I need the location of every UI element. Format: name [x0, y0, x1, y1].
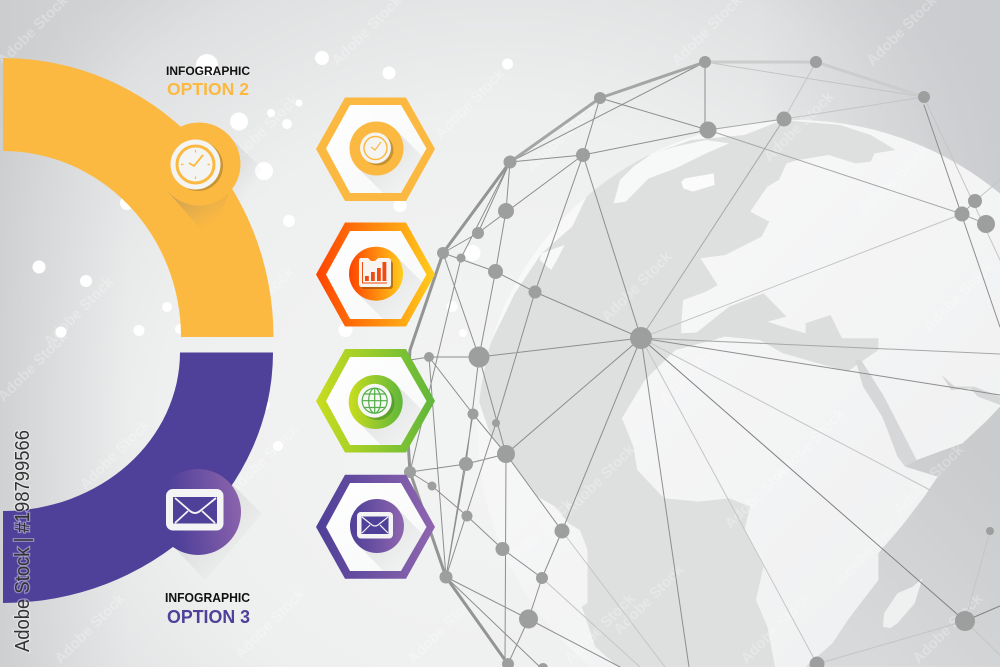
watermark: Adobe Stock [855, 141, 933, 218]
long shadow: yellow circle [205, 135, 262, 205]
watermark: Adobe Stock [832, 511, 910, 588]
hexagon badge: clock [316, 98, 435, 201]
Indian ocean [806, 407, 1000, 667]
watermark: Adobe Stock [220, 263, 298, 340]
heading: option 3: OPTION 3 [167, 607, 250, 627]
watermark: Adobe Stock [737, 590, 815, 667]
network nodes [404, 56, 995, 667]
network wireframe [406, 62, 1000, 667]
icon: clock small [360, 132, 394, 166]
heading: option 2 [166, 64, 250, 99]
heading: option 2: OPTION 2 [167, 79, 249, 99]
watermark: Adobe Stock [656, 331, 734, 408]
hexagon badge: globe [316, 349, 435, 452]
heading: option 3: INFOGRAPHIC [165, 591, 250, 605]
icon: bar chart [359, 258, 393, 289]
watermark: Adobe Stock [523, 98, 601, 175]
watermark: Adobe Stock [61, 83, 139, 160]
stock id vertical text: Adobe Stock | #198799566 [12, 430, 34, 652]
icon: globe [358, 384, 394, 420]
watermark: Adobe Stock [760, 88, 838, 165]
Mediterranean sea [676, 293, 878, 372]
Iceland [681, 173, 715, 192]
watermark: Adobe Stock [225, 91, 303, 168]
Madagascar [883, 578, 922, 628]
Greenland [614, 140, 729, 203]
Persian Gulf [942, 375, 1000, 405]
watermark: Adobe Stock [610, 561, 688, 638]
Red Sea [857, 362, 916, 466]
watermark: Adobe Stock [404, 590, 482, 667]
watermark: Adobe Stock [561, 590, 639, 667]
watermark: Adobe Stock [51, 590, 129, 667]
watermark: Adobe Stock [920, 258, 998, 335]
hexagon badge: bar chart [316, 222, 435, 326]
watermark: Adobe Stock [76, 416, 154, 493]
purple arc segment: option 3 [3, 352, 273, 603]
heading: option 2: INFOGRAPHIC [166, 64, 250, 78]
scattered white dots [32, 51, 513, 451]
watermark: Adobe Stock [231, 585, 309, 662]
hexagon badge: envelope [316, 474, 435, 579]
watermark: Adobe Stock [225, 421, 303, 498]
watermark: Adobe Stock [890, 441, 968, 518]
heading: option 3 [165, 591, 250, 627]
watermark: Adobe Stock [431, 65, 509, 142]
watermark: Adobe Stock [499, 495, 577, 572]
yellow arc segment: option 2 [3, 58, 274, 337]
watermark: Adobe Stock [561, 441, 639, 518]
icon: envelope [166, 489, 224, 530]
watermark: Adobe Stock [909, 590, 987, 667]
world map globe [470, 110, 1000, 667]
watermark: Adobe Stock [771, 405, 849, 482]
watermark: Adobe Stock [721, 455, 799, 532]
watermark: Adobe Stock [40, 273, 118, 350]
long shadow: purple circle [172, 481, 262, 580]
watermark: Adobe Stock [598, 248, 676, 325]
icon: clock [170, 140, 223, 191]
Canadian islands [540, 245, 565, 270]
icon: envelope small [357, 512, 393, 538]
Atlantic and Arctic ocean [478, 120, 896, 667]
